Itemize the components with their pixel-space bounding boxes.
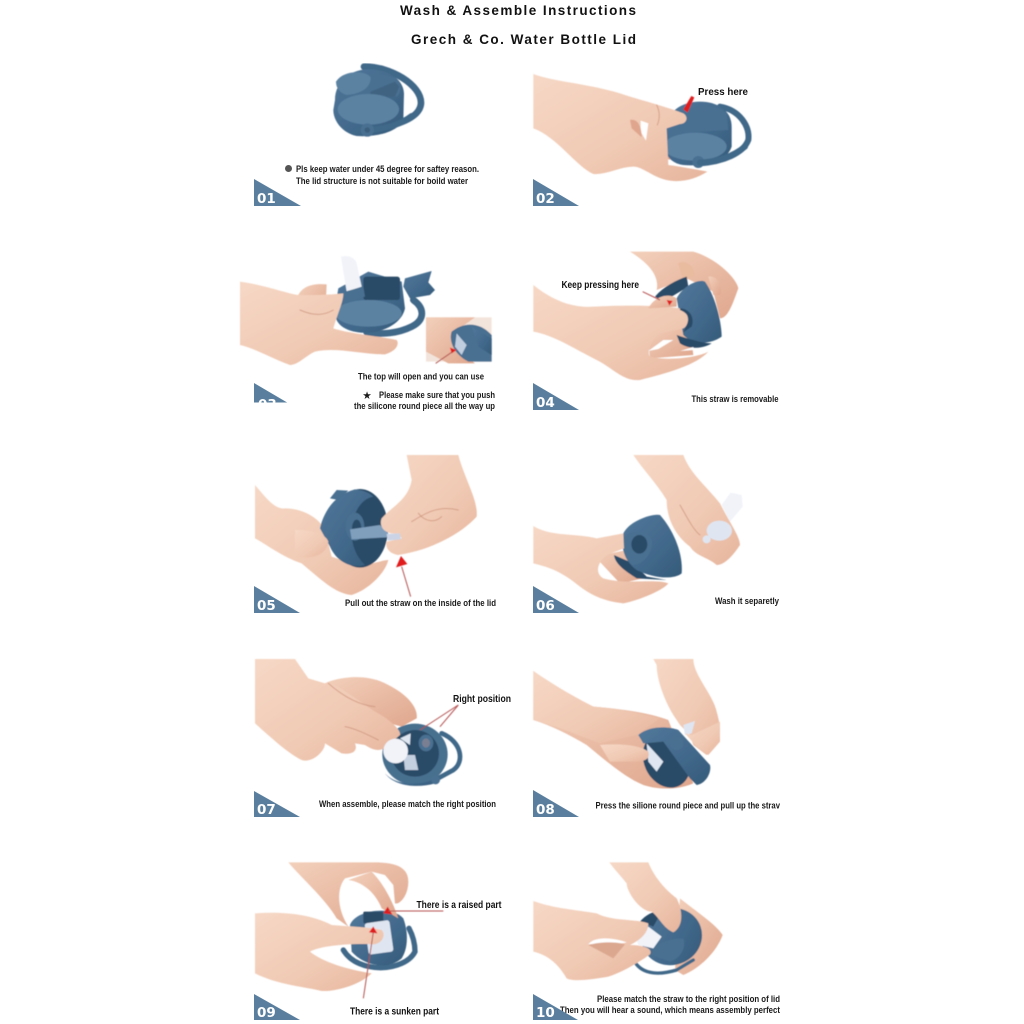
caption: This straw is removable — [692, 394, 778, 404]
step badge 07 — [254, 791, 300, 818]
title: Grech & Co. Water Bottle Lid — [411, 32, 636, 47]
photo: hand pressing lid button — [533, 74, 748, 181]
panel: step 08 press and pull — [533, 659, 780, 818]
step badge 06 — [533, 586, 579, 614]
photo: open lid with straw — [240, 256, 435, 365]
step badge 09: 09 — [257, 1005, 276, 1021]
step badge 01: 01 — [257, 191, 276, 207]
caption: The top will open and you can use — [358, 372, 484, 382]
bullet — [285, 165, 292, 172]
step badge 03 (cropped) — [254, 383, 287, 402]
panel: step 09 raised and sunken part — [254, 862, 502, 1021]
caption: Pull out the straw on the inside of the lid — [345, 598, 496, 608]
label: keep pressing here: Keep pressing here — [562, 280, 639, 291]
panel: step 03 top opens — [240, 256, 495, 413]
caption — [560, 994, 780, 1015]
warning note: ★ — [363, 390, 372, 400]
title: Wash & Assemble Instructions — [400, 3, 636, 18]
caption: Press the silione round piece and pull up the strav — [596, 800, 780, 810]
inset photo: silicone piece detail — [426, 317, 492, 363]
caption: Wash it separetly — [715, 596, 779, 606]
step badge 10 — [533, 994, 578, 1021]
step badge 07: 07 — [257, 802, 276, 818]
photo: straw removed from lid — [533, 455, 743, 603]
label: press here: Press here — [698, 86, 748, 98]
step badge 01 — [254, 179, 301, 207]
photo: fingers on lid parts — [255, 862, 443, 998]
note text: Pls keep water under 45 degree for saftey reason. — [296, 164, 479, 174]
step badge 05: 05 — [257, 598, 276, 614]
note text — [296, 164, 479, 186]
title — [400, 3, 636, 47]
panel: step 01 lid overview — [254, 67, 479, 207]
panel: step 10 assemble — [533, 862, 780, 1021]
step badge 02: 02 — [536, 191, 555, 207]
step badge 04 — [533, 383, 579, 411]
photo: matching the straw to lid — [255, 659, 460, 786]
note text: The lid structure is not suitable for boild water — [296, 176, 468, 186]
step badge 08 — [533, 790, 579, 818]
warning note — [354, 390, 495, 411]
label: right position: Right position — [453, 693, 511, 705]
photo: hands holding the lid — [533, 252, 738, 380]
caption: When assemble, please match the right position — [319, 799, 496, 809]
photo: closed lid with strap — [333, 67, 421, 137]
step badge 08: 08 — [536, 802, 555, 818]
panel: step 07 match position — [254, 659, 511, 818]
label: raised part: There is a raised part — [416, 899, 502, 911]
photo: pulling up the straw — [533, 659, 720, 796]
step badge 06: 06 — [536, 598, 555, 614]
step badge 05 — [254, 586, 300, 614]
caption: Please match the straw to the right position of lid — [597, 994, 780, 1004]
photo: pressing straw into lid — [533, 862, 723, 980]
step badge 10: 10 — [536, 1005, 555, 1021]
caption: Then you will hear a sound, which means assembly perfect — [560, 1005, 780, 1015]
panel: step 06 wash separately — [533, 455, 779, 614]
step badge 02 — [533, 179, 579, 207]
step badge 09 — [254, 994, 300, 1021]
panel: step 05 pull out straw — [254, 455, 496, 614]
warning note: Please make sure that you push — [379, 390, 495, 400]
step badge 03 (cropped): 03 — [258, 397, 277, 413]
warning note: the silicone round piece all the way up — [354, 401, 495, 411]
step badge 04: 04 — [536, 395, 555, 411]
label: sunken part: There is a sunken part — [350, 1006, 439, 1018]
panel: step 02 press here — [533, 74, 748, 207]
panel: step 04 keep pressing — [533, 252, 778, 411]
photo: pulling straw out of lid — [255, 455, 477, 597]
